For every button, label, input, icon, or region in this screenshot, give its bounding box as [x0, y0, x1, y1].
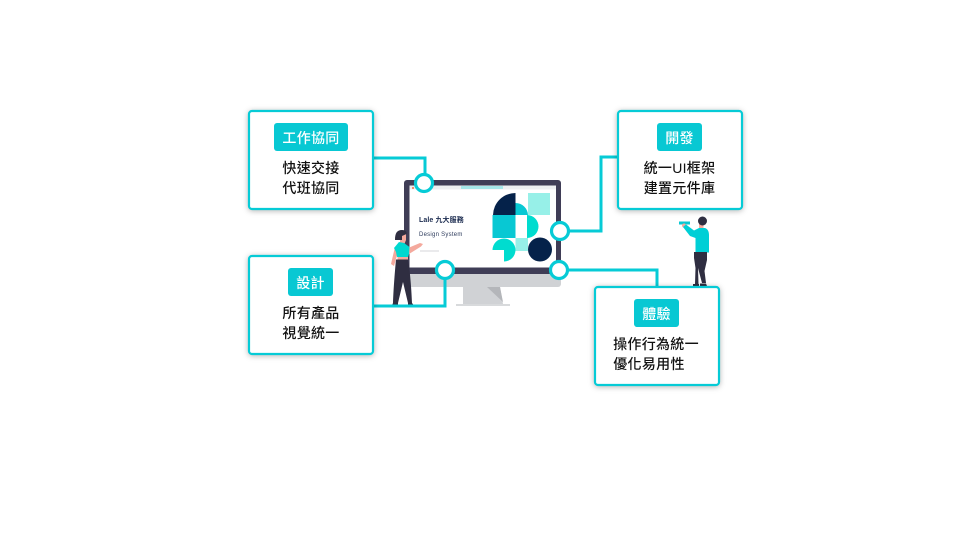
connector: collaboration	[374, 158, 425, 175]
node: development	[552, 222, 568, 240]
left arm	[391, 249, 398, 266]
hair	[395, 230, 407, 240]
text: 統一UI框架 建置元件庫: 統一UI框架	[644, 160, 715, 176]
text: 統一UI框架 建置元件庫	[644, 160, 715, 196]
waist	[398, 257, 408, 260]
monitor frame	[404, 180, 561, 274]
telescope	[679, 222, 690, 224]
illustration: woman pointing at screen	[391, 230, 423, 306]
illustration: desktop monitor	[404, 180, 561, 306]
connector: experience	[568, 270, 657, 286]
monitor screen	[410, 186, 556, 268]
connector: design	[374, 279, 445, 306]
shoes	[693, 284, 707, 286]
trousers	[694, 252, 707, 284]
badge: 體驗: 體驗	[642, 306, 671, 322]
monitor chin	[405, 273, 561, 287]
arm and torso	[683, 224, 709, 252]
right arm	[408, 243, 423, 254]
badge: 工作協同: 工作協同	[282, 130, 340, 146]
geometric artwork	[492, 193, 552, 262]
browser bar	[410, 186, 556, 190]
illustration: man with telescope	[679, 216, 709, 286]
monitor stand	[456, 287, 510, 306]
head	[698, 216, 707, 226]
node: design	[436, 262, 454, 278]
hand	[682, 224, 686, 228]
shirt	[394, 242, 410, 257]
text: 統一UI框架 建置元件庫: 建置元件庫	[644, 180, 715, 196]
shoes	[392, 303, 414, 306]
text: 快速交接 代班協同: 代班協同	[282, 180, 340, 196]
node: collaboration	[416, 174, 432, 192]
neck	[699, 224, 704, 229]
text: 所有產品 視覺統一: 所有產品	[282, 305, 340, 321]
screen title: Lale 九大服務	[419, 215, 464, 224]
node: experience	[550, 262, 568, 278]
screen fine print	[420, 250, 439, 252]
panel: 工作協同	[249, 111, 373, 209]
text: 所有產品 視覺統一	[282, 305, 340, 341]
text: 快速交接 代班協同: 快速交接	[282, 160, 340, 176]
panel: 體驗	[595, 287, 719, 385]
panel: 設計	[249, 256, 373, 354]
text: 快速交接 代班協同	[282, 160, 340, 196]
screen subtitle: Design System	[419, 232, 463, 238]
face and neck	[400, 234, 406, 245]
panel: 開發	[618, 111, 742, 209]
text: 操作行為統一 優化易用性: 優化易用性	[613, 356, 685, 372]
badge: 開發: 開發	[665, 130, 694, 146]
text: 操作行為統一 優化易用性: 操作行為統一	[613, 336, 699, 352]
badge: 設計: 設計	[296, 275, 325, 291]
text: 操作行為統一 優化易用性	[613, 336, 699, 372]
connector: development	[569, 157, 617, 231]
text: 所有產品 視覺統一: 視覺統一	[282, 325, 340, 341]
trousers	[393, 260, 412, 303]
